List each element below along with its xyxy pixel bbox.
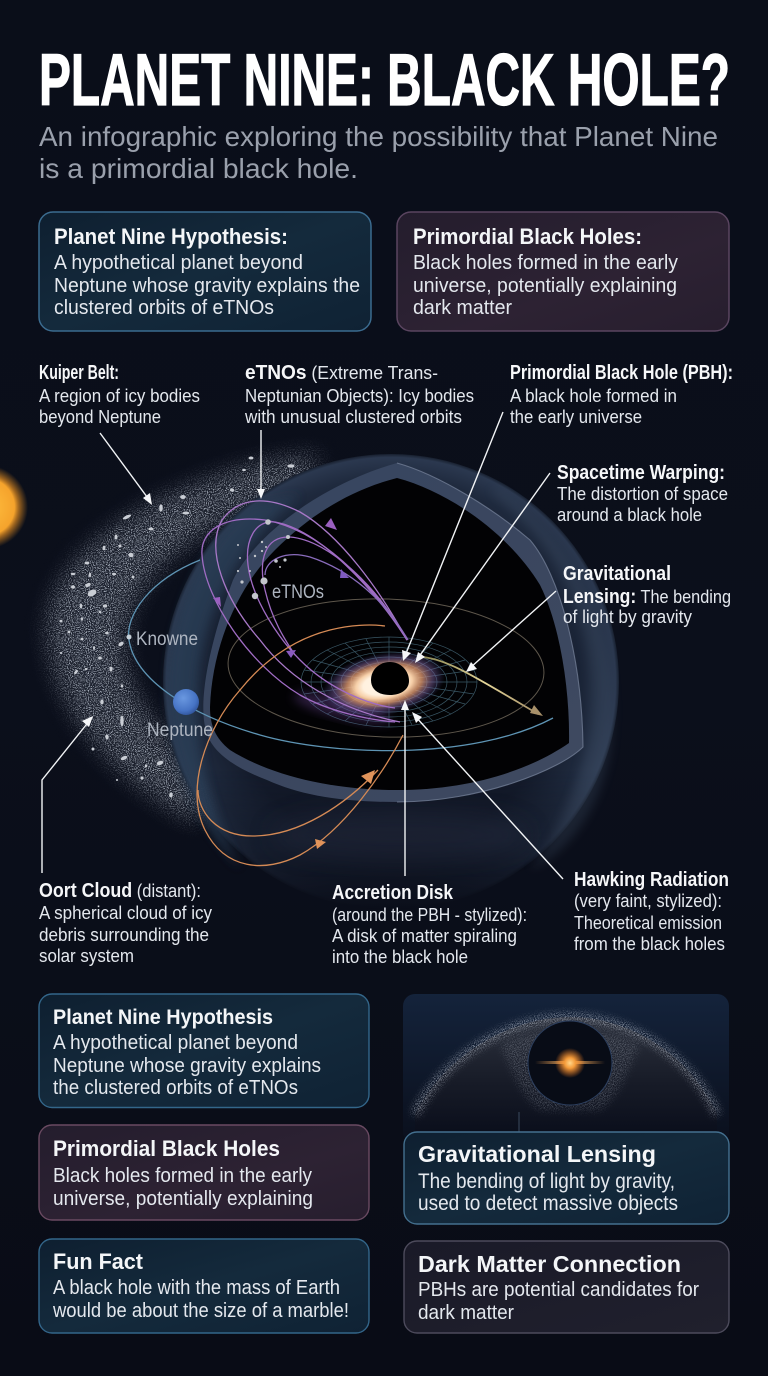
panel body text — [53, 1165, 313, 1210]
label: Gravitational Lensing: Lensing: The bending — [563, 586, 731, 608]
spacetime warping grid — [301, 637, 477, 727]
label: Hawking Radiation: Theoretical emission — [574, 912, 722, 933]
panel body text — [413, 251, 679, 319]
label: Accretion Disk — [332, 882, 527, 967]
panel heading: Planet Nine Hypothesis — [53, 1006, 273, 1029]
label: Hawking Radiation: from the black holes — [574, 933, 725, 954]
panel: Gravitational Lensing — [404, 1132, 729, 1224]
label: Gravitational Lensing: Gravitational — [563, 563, 671, 585]
label: eTNOs definition: with unusual clustered orbits — [244, 406, 462, 427]
panel body text: dark matter — [413, 296, 512, 319]
label: Hawking Radiation: (very faint, stylized): — [574, 890, 722, 911]
label: eTNOs definition: Neptunian Objects): Icy bodies — [245, 385, 474, 406]
label: Primordial Black Hole: A black hole formed in — [510, 385, 677, 406]
panel: Fun Fact — [39, 1239, 369, 1333]
panel heading: Dark Matter Connection — [418, 1251, 681, 1277]
sphere right grainy edge — [490, 490, 612, 870]
label: eTNOs definition: eTNOs (Extreme Trans- — [245, 362, 438, 384]
orange orbits — [197, 625, 403, 866]
panel body text: A hypothetical planet beyond — [54, 251, 303, 274]
label: Primordial Black Hole: the early universe — [510, 406, 642, 427]
star flare — [535, 1061, 605, 1064]
icon: sun — [0, 465, 28, 549]
label: Gravitational Lensing: of light by gravity — [563, 606, 693, 627]
panel body text: universe, potentially explaining — [53, 1188, 313, 1210]
Neptune orbit — [129, 560, 553, 751]
label: Accretion Disk: Accretion Disk — [332, 882, 454, 904]
label: Spacetime Warping: around a black hole — [557, 504, 702, 525]
panel body text — [418, 1278, 699, 1324]
arrow: Kuiper Belt — [100, 433, 152, 505]
eTNO orbit arrowheads — [213, 518, 349, 658]
label: eTNOs: eTNOs — [272, 581, 324, 603]
panel heading: Fun Fact — [53, 1249, 144, 1274]
panel: Planet Nine Hypothesis (bottom) — [39, 994, 369, 1108]
label: Primordial Black Hole — [510, 362, 733, 427]
label: Kuiper Belt: A region of icy bodies — [39, 385, 200, 406]
planet: Neptune — [173, 689, 199, 715]
eTNO bodies — [237, 519, 290, 599]
panel body text: used to detect massive objects — [418, 1192, 678, 1215]
Known object dot — [126, 634, 132, 640]
panel body text — [54, 251, 360, 319]
label: Spacetime Warping: The distortion of space — [557, 483, 728, 504]
label: Oort Cloud: debris surrounding the — [39, 924, 209, 945]
lensing dome — [415, 1017, 717, 1131]
arrow: Gravitational Lensing — [466, 591, 556, 672]
sphere bottom haze — [270, 809, 530, 861]
cutaway highlight — [397, 463, 583, 802]
label: Accretion Disk: into the black hole — [332, 946, 468, 967]
label: Kuiper Belt: Kuiper Belt: — [39, 362, 119, 384]
arrow: Spacetime Warping — [415, 473, 550, 663]
panel body text: universe, potentially explaining — [413, 274, 677, 297]
panel: Primordial Black Holes (top) — [397, 212, 729, 331]
panel: Dark Matter Connection — [404, 1241, 729, 1333]
label: eTNOs definition — [244, 362, 474, 427]
panel body text: dark matter — [418, 1301, 514, 1324]
black hole — [371, 662, 409, 695]
orange orbit arrowheads — [315, 770, 375, 849]
subtitle — [39, 121, 718, 184]
panel body text: the clustered orbits of eTNOs — [53, 1077, 298, 1099]
panel: Primordial Black Holes (bottom) — [39, 1125, 369, 1220]
label: Accretion Disk: A disk of matter spiraling — [332, 925, 517, 946]
label: Oort Cloud: solar system — [39, 945, 134, 966]
label: Oort Cloud: A spherical cloud of icy — [39, 902, 213, 923]
eTNO orbits — [202, 501, 408, 722]
panel body text: clustered orbits of eTNOs — [54, 296, 274, 319]
panel body text: Black holes formed in the early — [413, 251, 679, 274]
cutaway interior — [210, 478, 569, 790]
cutaway rim — [203, 463, 583, 802]
arrow: Accretion Disk — [401, 700, 409, 876]
panel body text: PBHs are potential candidates for — [418, 1278, 699, 1301]
lensed light arrowhead — [530, 705, 543, 716]
accretion disk glow — [318, 643, 450, 725]
dark lens body — [528, 1021, 612, 1105]
label: Kuiper Belt — [39, 362, 200, 427]
inner tan orbit — [226, 594, 546, 742]
thin vertical line — [518, 1112, 520, 1132]
label: Hawking Radiation — [574, 869, 729, 954]
label: Neptune: Neptune — [147, 719, 213, 741]
outer sphere — [163, 454, 619, 910]
arrow: PBH — [402, 412, 503, 661]
panel body text: Neptune whose gravity explains — [53, 1055, 321, 1077]
panel body text — [53, 1032, 321, 1099]
panel body text: Black holes formed in the early — [53, 1165, 312, 1187]
panel heading: Gravitational Lensing — [418, 1141, 656, 1167]
label: Oort Cloud: Oort Cloud (distant): — [39, 880, 201, 902]
Kuiper belt debris cloud — [48, 456, 320, 822]
panel body text — [52, 1277, 349, 1322]
label: Spacetime Warping — [557, 462, 728, 525]
panel body text: would be about the size of a marble! — [52, 1300, 349, 1322]
label: Accretion Disk: (around the PBH - stylized): — [332, 904, 527, 925]
arrow: Oort Cloud — [42, 716, 93, 873]
panel heading: Primordial Black Holes — [53, 1136, 280, 1161]
gravitational lensing beam — [423, 657, 538, 714]
panel body text — [418, 1170, 678, 1215]
label: Hawking Radiation: Hawking Radiation — [574, 869, 729, 891]
label: Spacetime Warping: Spacetime Warping: — [557, 462, 725, 484]
diagram: solar system and cutaway sphere — [48, 454, 619, 910]
subtitle: is a primordial black hole. — [39, 153, 358, 184]
label: Oort Cloud — [39, 880, 213, 966]
panel body text: Neptune whose gravity explains the — [54, 274, 360, 297]
panel heading: Planet Nine Hypothesis: — [54, 224, 288, 249]
speckled haze inside dome — [500, 1031, 640, 1110]
panel body text: The bending of light by gravity, — [418, 1170, 675, 1193]
panel body text: A hypothetical planet beyond — [53, 1032, 298, 1054]
star — [555, 1048, 585, 1078]
panel body text: A black hole with the mass of Earth — [53, 1277, 340, 1299]
label: Gravitational Lensing — [563, 563, 731, 627]
label: Kuiper Belt: beyond Neptune — [39, 406, 161, 427]
speckled lensing arc — [415, 1017, 717, 1114]
inset illustration: lensing arc — [403, 994, 729, 1144]
arrow: eTNOs — [257, 430, 265, 499]
panel: Planet Nine Hypothesis (top) — [39, 212, 371, 331]
label: Knowne: Knowne — [136, 628, 198, 650]
sphere lit left band — [168, 495, 300, 868]
purple glow under disk — [291, 686, 393, 730]
arrow: Hawking Radiation — [412, 712, 563, 879]
panel heading: Primordial Black Holes: — [413, 224, 642, 249]
subtitle: An infographic exploring the possibility that Planet Nine — [39, 121, 718, 152]
